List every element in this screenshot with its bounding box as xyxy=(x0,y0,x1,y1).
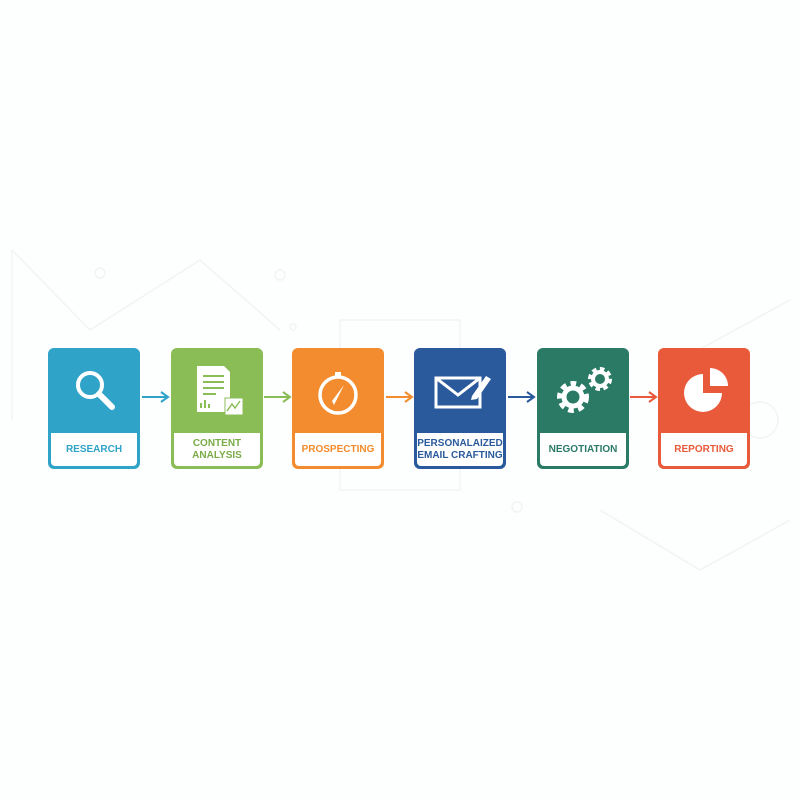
arrow 4 xyxy=(508,391,536,403)
arrow 2 xyxy=(264,391,292,403)
card: reporting: REPORTING xyxy=(674,444,734,454)
card: research: RESEARCH xyxy=(66,444,122,454)
card: reporting xyxy=(658,348,750,469)
card: research xyxy=(48,348,140,469)
icon: compass xyxy=(318,372,358,415)
card: prospecting xyxy=(292,348,384,469)
arrow 5 xyxy=(630,391,658,403)
icon: pie chart xyxy=(684,368,728,412)
card: personalized email crafting xyxy=(414,348,506,469)
card: content analysis: ANALYSIS xyxy=(192,450,242,460)
card: personalized email crafting: PERSONALAIZED xyxy=(417,438,503,448)
card: negotiation: NEGOTIATION xyxy=(549,444,617,454)
icon: envelope with pen xyxy=(434,376,491,408)
card: personalized email crafting: EMAIL CRAFTING xyxy=(417,450,503,460)
card: prospecting: PROSPECTING xyxy=(302,444,374,454)
arrow 3 xyxy=(386,391,414,403)
icon: magnifier xyxy=(76,371,115,410)
icon: document chart xyxy=(197,366,242,414)
card: content analysis xyxy=(171,348,263,469)
arrow 1 xyxy=(142,391,170,403)
card: content analysis: CONTENT xyxy=(193,438,241,448)
card: negotiation xyxy=(537,348,629,469)
icon: gears xyxy=(557,367,612,413)
